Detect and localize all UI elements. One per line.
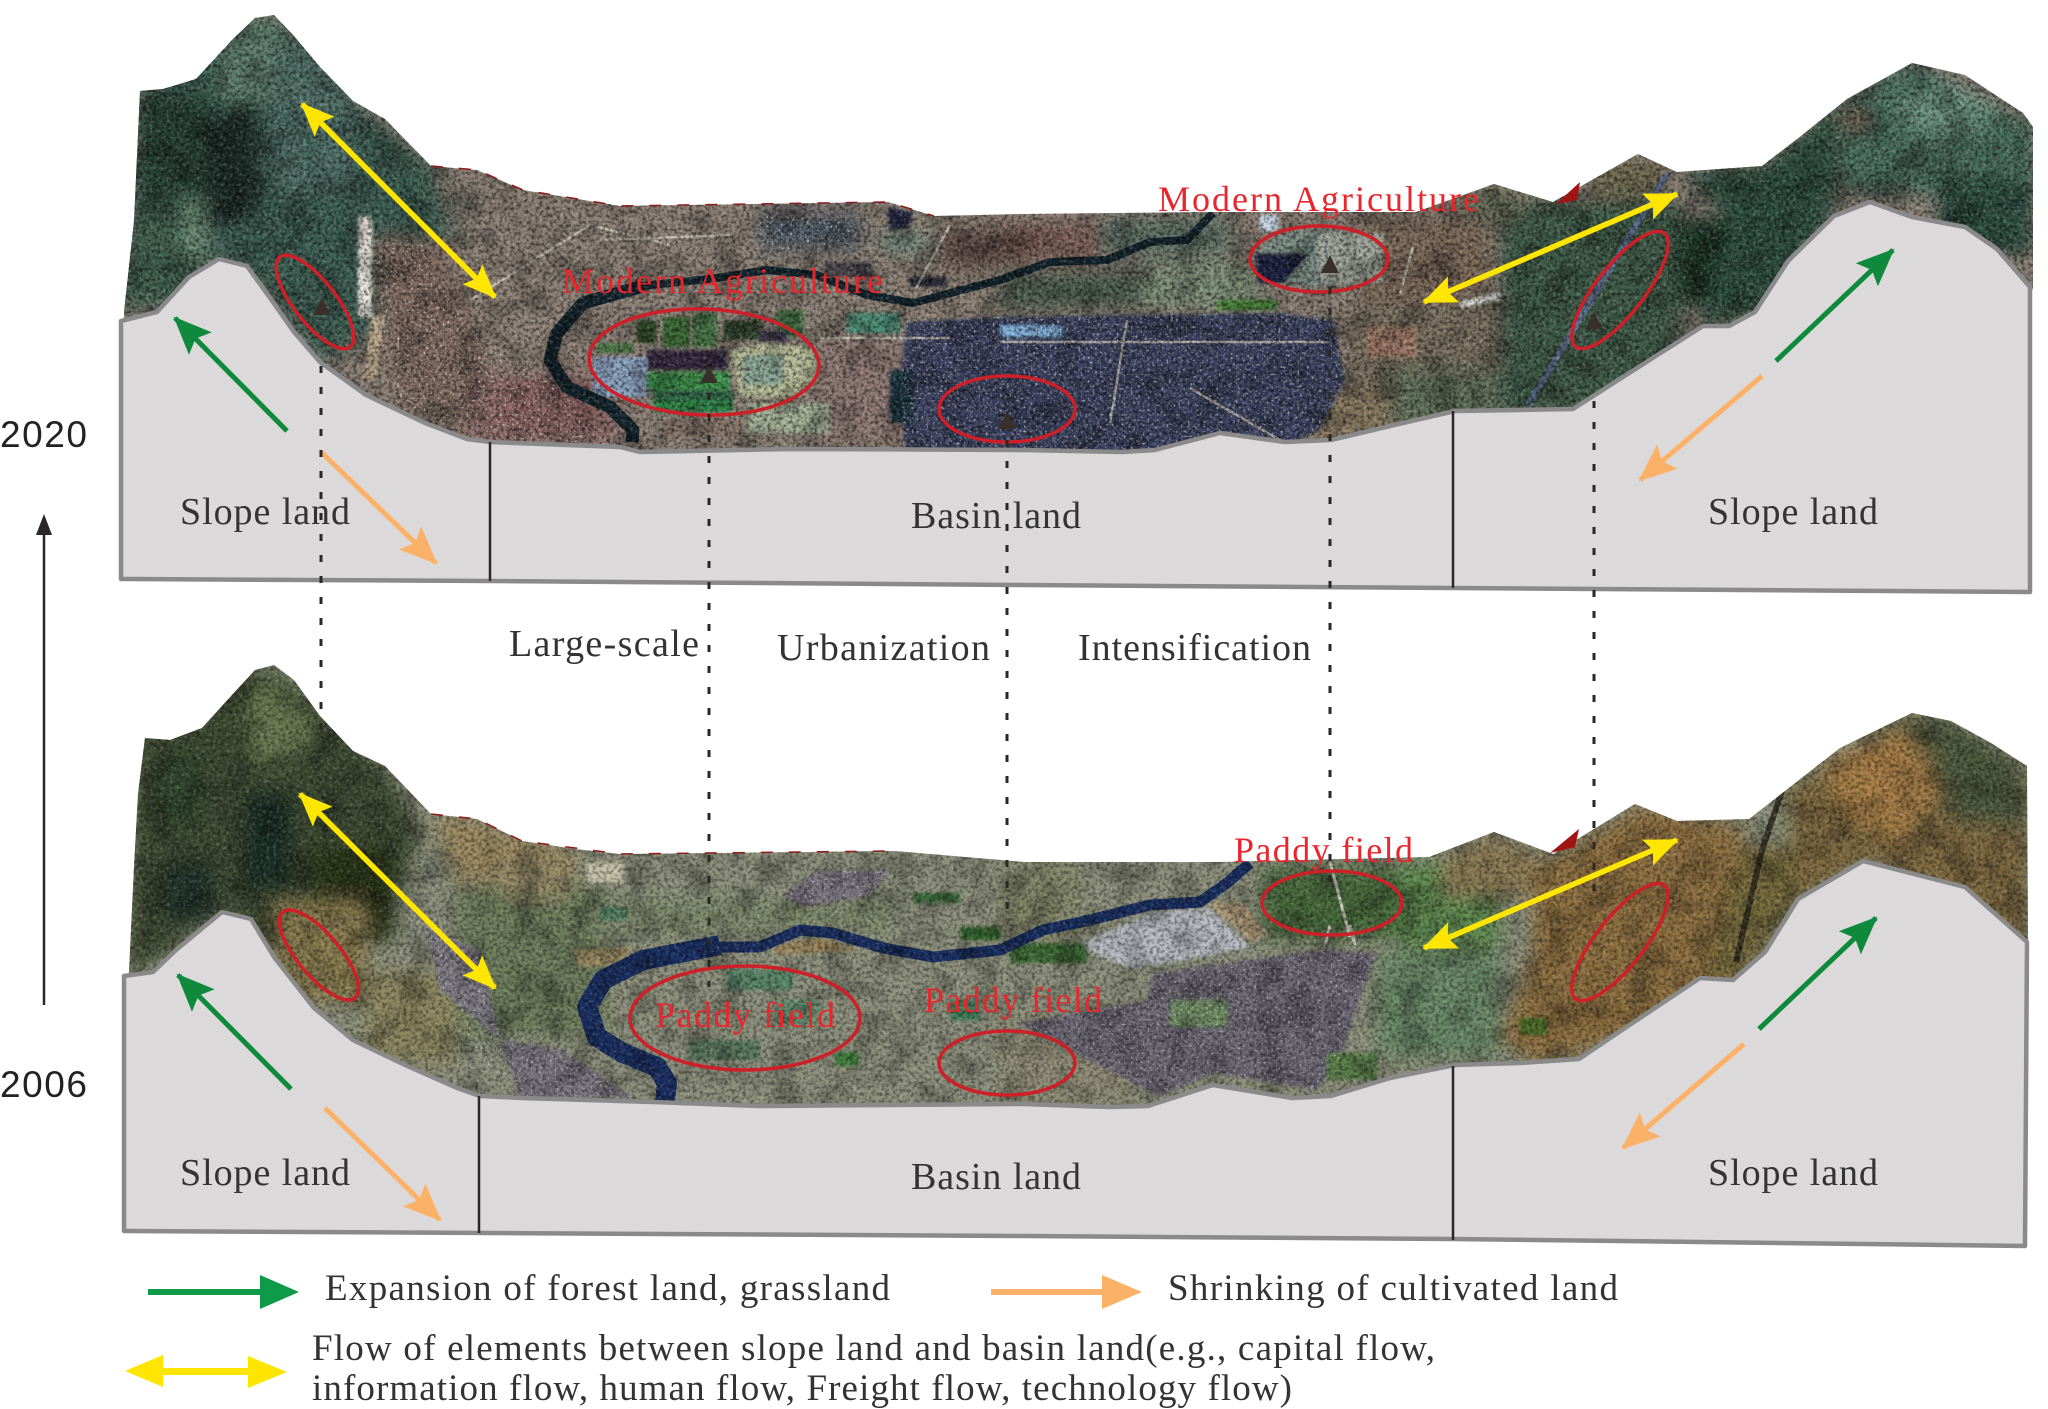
divider: basin and slope [1452,1066,1454,1240]
year label 2006: 2006 [0,1064,87,1105]
label: paddy field centre-left: Paddy field [655,995,835,1035]
time axis arrow [36,514,52,1005]
label: basin land 2006: Basin land [911,1156,1081,1198]
legend [125,1268,1618,1409]
texture 2020 [120,10,2045,465]
label: slope land right 2006: Slope land [1708,1152,1878,1194]
panel: 2020 cross-section [120,10,2045,592]
label: paddy field right: Paddy field [1234,830,1413,870]
legend text: flow line 2: information flow, human flow, Freight flow, technology flow) [312,1368,1292,1409]
dark red terrain edge [431,166,934,216]
dotted connector lines [321,287,1594,987]
legend arrow: green [148,1275,299,1309]
label: intensification: Intensification [1078,627,1311,669]
arrow: yellow flow left 2006 [300,794,495,988]
divider: slope and basin [478,1096,480,1233]
satellite terrain 2020 [120,10,2045,465]
year label 2020: 2020 [0,414,87,455]
divider: basin and slope [1452,411,1454,588]
arrow: yellow flow right 2020 [1424,194,1677,302]
arrow: orange cultivated shrink left 2020 [321,452,436,563]
satellite terrain 2006 [120,660,2045,1120]
arrow: green forest expansion left 2020 [175,318,287,431]
texture 2006 [120,660,2045,1120]
legend text: flow line 1: Flow of elements between slope land and basin land(e.g., capital flow, [312,1328,1435,1369]
label: paddy field centre: Paddy field [924,980,1102,1020]
arrow: orange cultivated shrink right 2006 [1623,1044,1744,1148]
legend arrow: orange [991,1275,1142,1309]
arrow: orange cultivated shrink left 2006 [325,1108,440,1220]
legend text: expansion: Expansion of forest land, grassland [325,1268,890,1309]
arrow: orange cultivated shrink right 2020 [1640,376,1762,480]
town base 2020 [900,313,1345,452]
arrow: green forest expansion right 2006 [1759,918,1876,1029]
grey ground block 2020 [121,202,2030,592]
roads 2020 [1527,174,1667,407]
location triangles 2020 [313,255,1603,429]
dark red terrain edge [431,814,895,854]
arrow: yellow flow left 2020 [302,104,495,297]
label: large-scale: Large-scale [509,623,699,665]
label: slope land left 2020: Slope land [180,491,350,533]
roads and ridge 2006 [1325,862,1355,945]
grey ground block 2006 [124,861,2027,1246]
ellipse markers 2020 [263,218,1683,442]
red sliver [1550,829,1579,853]
label: slope land left 2006: Slope land [180,1152,350,1194]
panel: 2006 cross-section [120,660,2045,1246]
arrow: green forest expansion right 2020 [1776,250,1893,361]
legend text: shrinking: Shrinking of cultivated land [1168,1268,1618,1309]
label: basin land 2020: Basin land [911,495,1081,537]
river 2006 [700,863,1250,957]
label: modern agriculture right: Modern Agriculture [1158,179,1479,219]
label: urbanization: Urbanization [777,627,990,669]
arrow: yellow flow right 2006 [1424,840,1677,948]
label: modern agriculture left: Modern Agriculture [562,261,883,301]
legend arrow: yellow double [125,1355,287,1388]
red sliver [1556,182,1580,204]
ellipse markers 2006 [267,870,1683,1095]
river 2020 [628,212,1216,442]
divider: slope and basin [489,442,491,581]
label: slope land right 2020: Slope land [1708,491,1878,533]
arrow: green forest expansion left 2006 [178,975,291,1089]
